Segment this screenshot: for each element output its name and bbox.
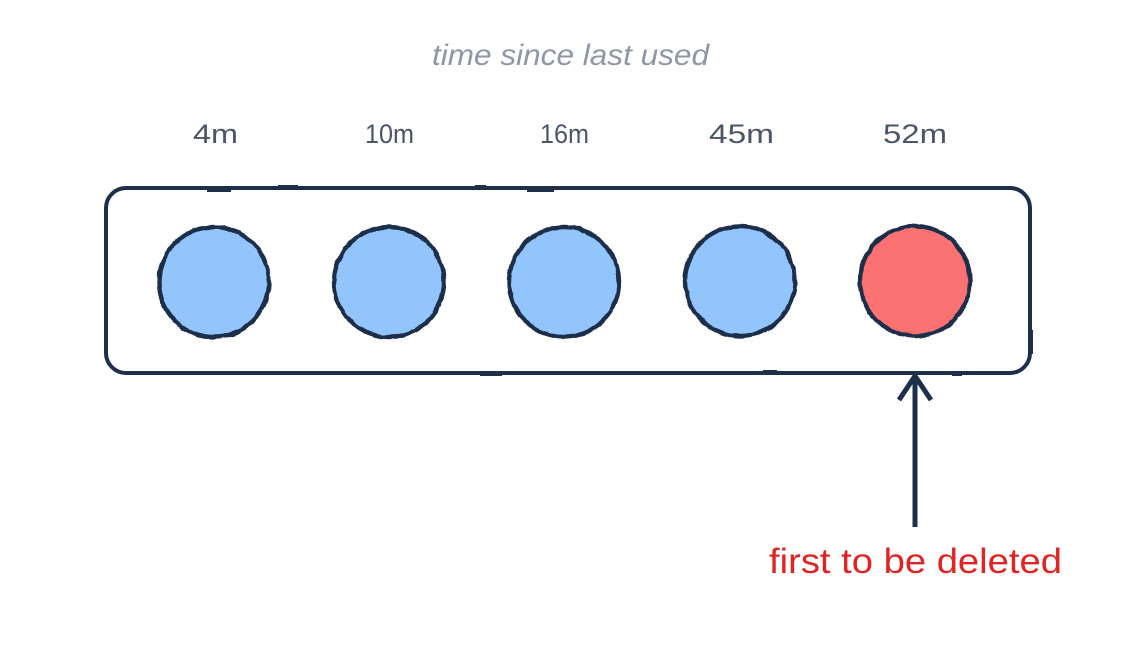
label: 4m: 4m [193, 119, 238, 149]
label: 45m: 45m [709, 119, 774, 149]
circle: 45m item [685, 226, 795, 336]
circle: 16m item [509, 227, 619, 337]
label: 16m: 16m [540, 119, 589, 149]
label: 10m: 10m [365, 119, 414, 149]
circle: 52m item, oldest [860, 226, 970, 336]
circle: 10m item [334, 227, 444, 337]
panel: rounded container [106, 185, 1033, 376]
label: 52m: 52m [883, 119, 947, 149]
circles [159, 226, 970, 337]
callout: first to be deleted: first to be deleted [769, 542, 1062, 581]
circle: 4m item [159, 227, 269, 337]
arrow: pointing at the oldest item [899, 376, 931, 527]
time labels [193, 119, 947, 149]
title: time since last used: time since last used [432, 39, 710, 72]
